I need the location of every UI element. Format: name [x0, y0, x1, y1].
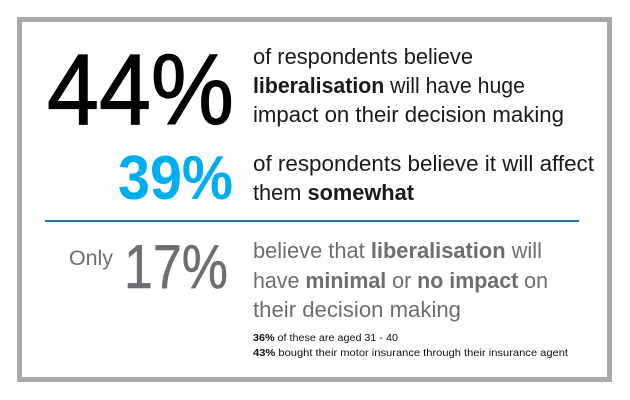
44% description: of respondents believe [253, 44, 473, 69]
17% description: believe that liberalisation will [253, 238, 542, 263]
footnotes: 36% of these are aged 31 - 40 [253, 333, 398, 344]
stat: 39% [118, 144, 594, 213]
big number 17%: 17% [124, 233, 228, 302]
stat: 44% [47, 34, 564, 146]
footnotes: 43% bought their motor insurance through their insurance agent [253, 348, 568, 359]
stat: 17% [69, 233, 568, 359]
big number 44%: 44% [47, 34, 234, 146]
big number 39%: 39% [118, 144, 233, 213]
44% description: liberalisation will have huge [253, 73, 525, 98]
label Only: Only [69, 247, 114, 270]
17% description [253, 238, 548, 322]
39% description [253, 151, 594, 205]
44% description [253, 44, 564, 127]
39% description: them somewhat [253, 180, 415, 205]
footnotes [253, 333, 568, 359]
17% description: their decision making [253, 297, 461, 322]
17% description: have minimal or no impact on [253, 268, 548, 293]
44% description: impact on their decision making [253, 102, 564, 127]
39% description: of respondents believe it will affect [253, 151, 594, 176]
